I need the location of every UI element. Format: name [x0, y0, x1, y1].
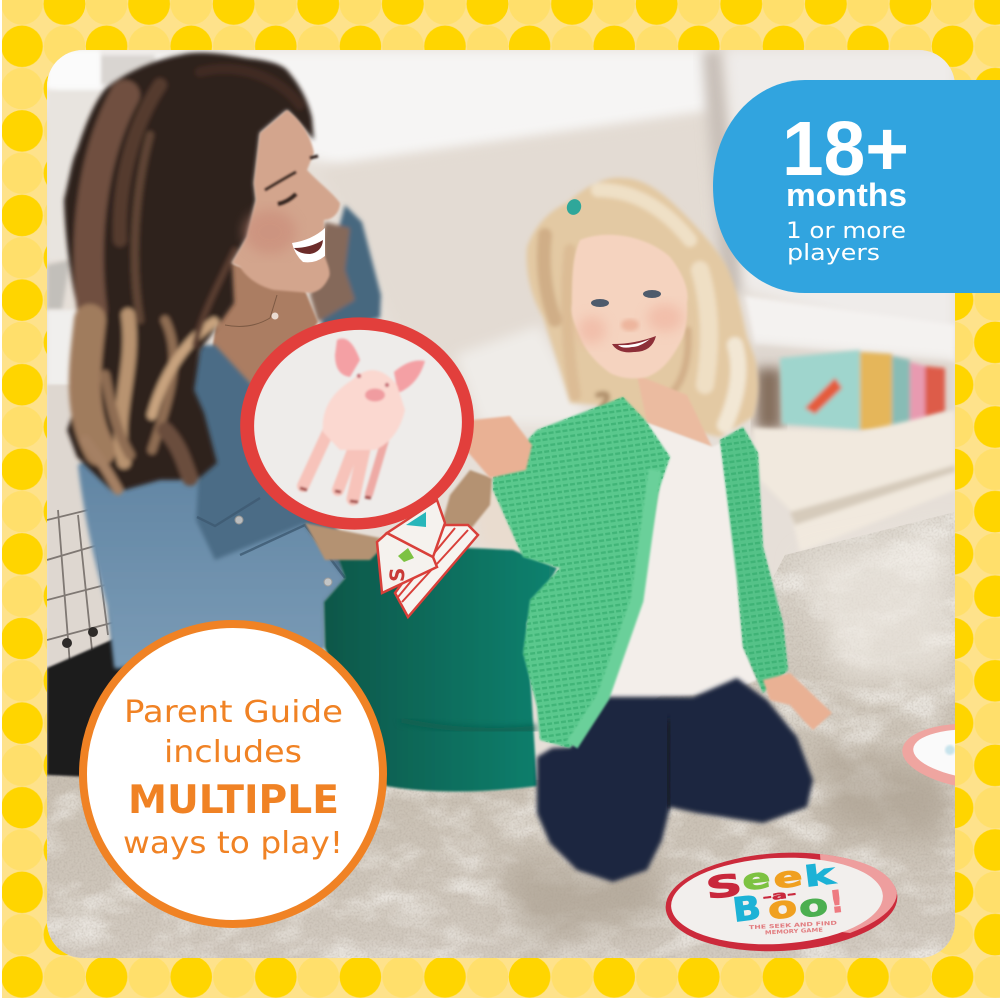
player count line 2: players — [787, 241, 880, 266]
partial round card at right edge — [899, 717, 1000, 797]
pig picture card — [240, 317, 474, 530]
logo text: o — [766, 889, 799, 927]
logo tagline line 2: MEMORY GAME — [765, 927, 823, 937]
callout: parent guide — [83, 624, 383, 924]
girl: hair tie — [566, 199, 582, 215]
logo text: B — [731, 888, 763, 930]
logo text: -a- — [762, 887, 797, 904]
girl: shirt — [603, 423, 757, 697]
months label: months — [786, 177, 907, 213]
girl: neck — [637, 375, 712, 447]
round Seek-a-Boo card on floor — [666, 852, 898, 952]
callout line 2: includes — [164, 735, 302, 770]
woman: necklace — [225, 295, 278, 326]
logo text: o — [797, 887, 830, 926]
sofa — [47, 260, 385, 790]
woman: hair — [64, 53, 314, 493]
girl: cardigan left — [493, 397, 670, 748]
toys in background — [780, 350, 945, 430]
logo tagline: THE SEEK AND FIND — [749, 921, 838, 931]
girl: cardigan right — [720, 427, 788, 693]
girl: cheeks — [578, 304, 683, 344]
logo text: ! — [828, 884, 846, 921]
logo text: e — [740, 861, 772, 897]
woman: neck and chest — [212, 263, 319, 386]
woman: knee fold — [432, 720, 540, 732]
logo text: S — [704, 868, 744, 907]
woman: denim sleeve — [78, 440, 345, 668]
woman: eye and brow — [265, 156, 318, 204]
callout line 1: Parent Guide — [124, 695, 343, 730]
blanket — [752, 410, 955, 552]
girl: leggings — [537, 678, 813, 882]
woman: denim shirt chest — [110, 345, 345, 668]
girl: hands — [462, 416, 832, 730]
rug shadow patches — [500, 530, 955, 950]
woman: laughing mouth — [292, 228, 325, 262]
woman: pants — [324, 547, 557, 792]
badge: age tab — [713, 80, 1000, 293]
fan of picture cards — [377, 500, 478, 617]
woman: face — [232, 110, 340, 293]
pig — [300, 339, 425, 502]
callout emphasis: MULTIPLE — [128, 778, 339, 823]
logo text: e — [771, 859, 804, 896]
girl: face — [571, 235, 688, 378]
logo text — [708, 864, 842, 922]
player count line 1: 1 or more — [786, 219, 906, 244]
fan of picture cards: S — [385, 567, 409, 582]
logo text: k — [802, 857, 838, 894]
rug — [47, 512, 955, 958]
age number: 18+ — [782, 106, 909, 192]
woman: pocket and cuff details — [197, 498, 345, 586]
girl: hair — [527, 178, 758, 437]
woman: collar and hair behind face — [310, 205, 381, 335]
callout line 4: ways to play! — [123, 826, 343, 861]
woman: hands — [305, 470, 492, 560]
woman: cheek — [244, 210, 296, 254]
girl: knee shadow — [668, 720, 670, 807]
girl: eyes and smile — [591, 290, 661, 352]
